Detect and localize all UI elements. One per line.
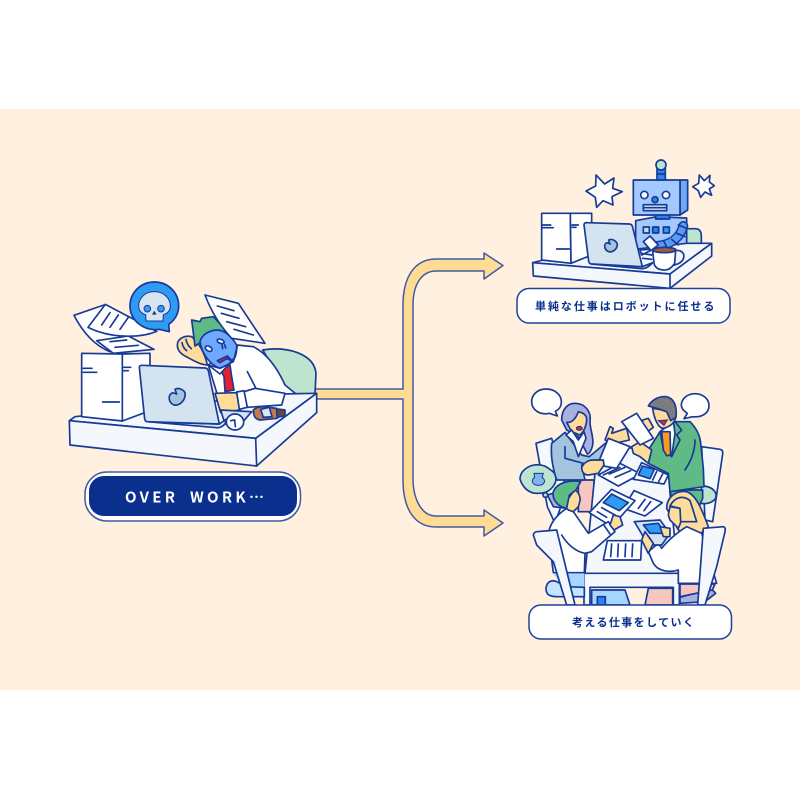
label: thinking work — [529, 605, 732, 639]
branching arrow — [312, 253, 503, 536]
bottle — [253, 407, 285, 420]
person bottom right — [634, 491, 717, 583]
coffee cup — [653, 247, 684, 270]
robot antenna — [656, 160, 666, 180]
robot body — [636, 217, 687, 250]
held paper left — [597, 438, 630, 468]
label: over work — [85, 472, 300, 521]
label: robot task: 単純な仕事はロボットに任せる — [535, 298, 716, 314]
stacked papers — [74, 304, 157, 353]
woman lower hand — [582, 460, 604, 475]
speech bubble left — [532, 389, 561, 416]
tie — [220, 365, 234, 392]
crumpled paper — [221, 410, 252, 424]
star right — [693, 175, 714, 197]
illustration: team meeting — [520, 389, 725, 605]
laptop — [584, 223, 653, 269]
worker head — [192, 317, 237, 368]
back chair right — [702, 447, 723, 522]
collar — [208, 346, 237, 374]
woman left — [551, 403, 629, 480]
thought bubble — [520, 465, 556, 497]
laptop — [139, 365, 226, 428]
star left — [586, 175, 622, 207]
front chair right — [698, 527, 725, 605]
robot neck — [656, 214, 670, 219]
label: thinking work: 考える仕事をしていく — [572, 614, 695, 630]
robot hand — [640, 236, 658, 255]
robot arm — [657, 225, 687, 248]
table documents lower — [589, 489, 662, 560]
illustration: robot at desk — [533, 160, 714, 288]
label: over work: WORK — [190, 486, 249, 508]
clock — [226, 414, 244, 430]
chair — [687, 229, 701, 245]
person bottom left — [548, 481, 623, 573]
held paper right — [622, 413, 653, 445]
front chair left — [533, 530, 575, 605]
label: over work: OVER — [125, 486, 178, 508]
worker body — [208, 345, 296, 403]
table documents top — [598, 463, 668, 486]
resting arm and hand — [215, 388, 285, 413]
label: over work: … — [249, 486, 264, 508]
file box — [542, 213, 592, 263]
chair — [263, 349, 316, 394]
paper on head — [205, 295, 265, 343]
table — [584, 447, 679, 605]
man right — [632, 397, 704, 510]
keyboard hand lines — [642, 253, 652, 259]
file box — [82, 353, 150, 421]
legs and seats — [546, 573, 716, 605]
seat cushions — [547, 480, 716, 512]
label: robot task — [517, 288, 730, 323]
hand on cheek — [177, 336, 207, 365]
desk — [533, 243, 712, 288]
desk — [69, 393, 317, 466]
back chair left — [536, 438, 567, 523]
speech bubble: skull — [130, 282, 179, 332]
speech bubble right — [681, 394, 709, 419]
background band — [0, 109, 800, 690]
robot head — [633, 180, 688, 215]
illustration: overworked employee — [69, 282, 317, 466]
